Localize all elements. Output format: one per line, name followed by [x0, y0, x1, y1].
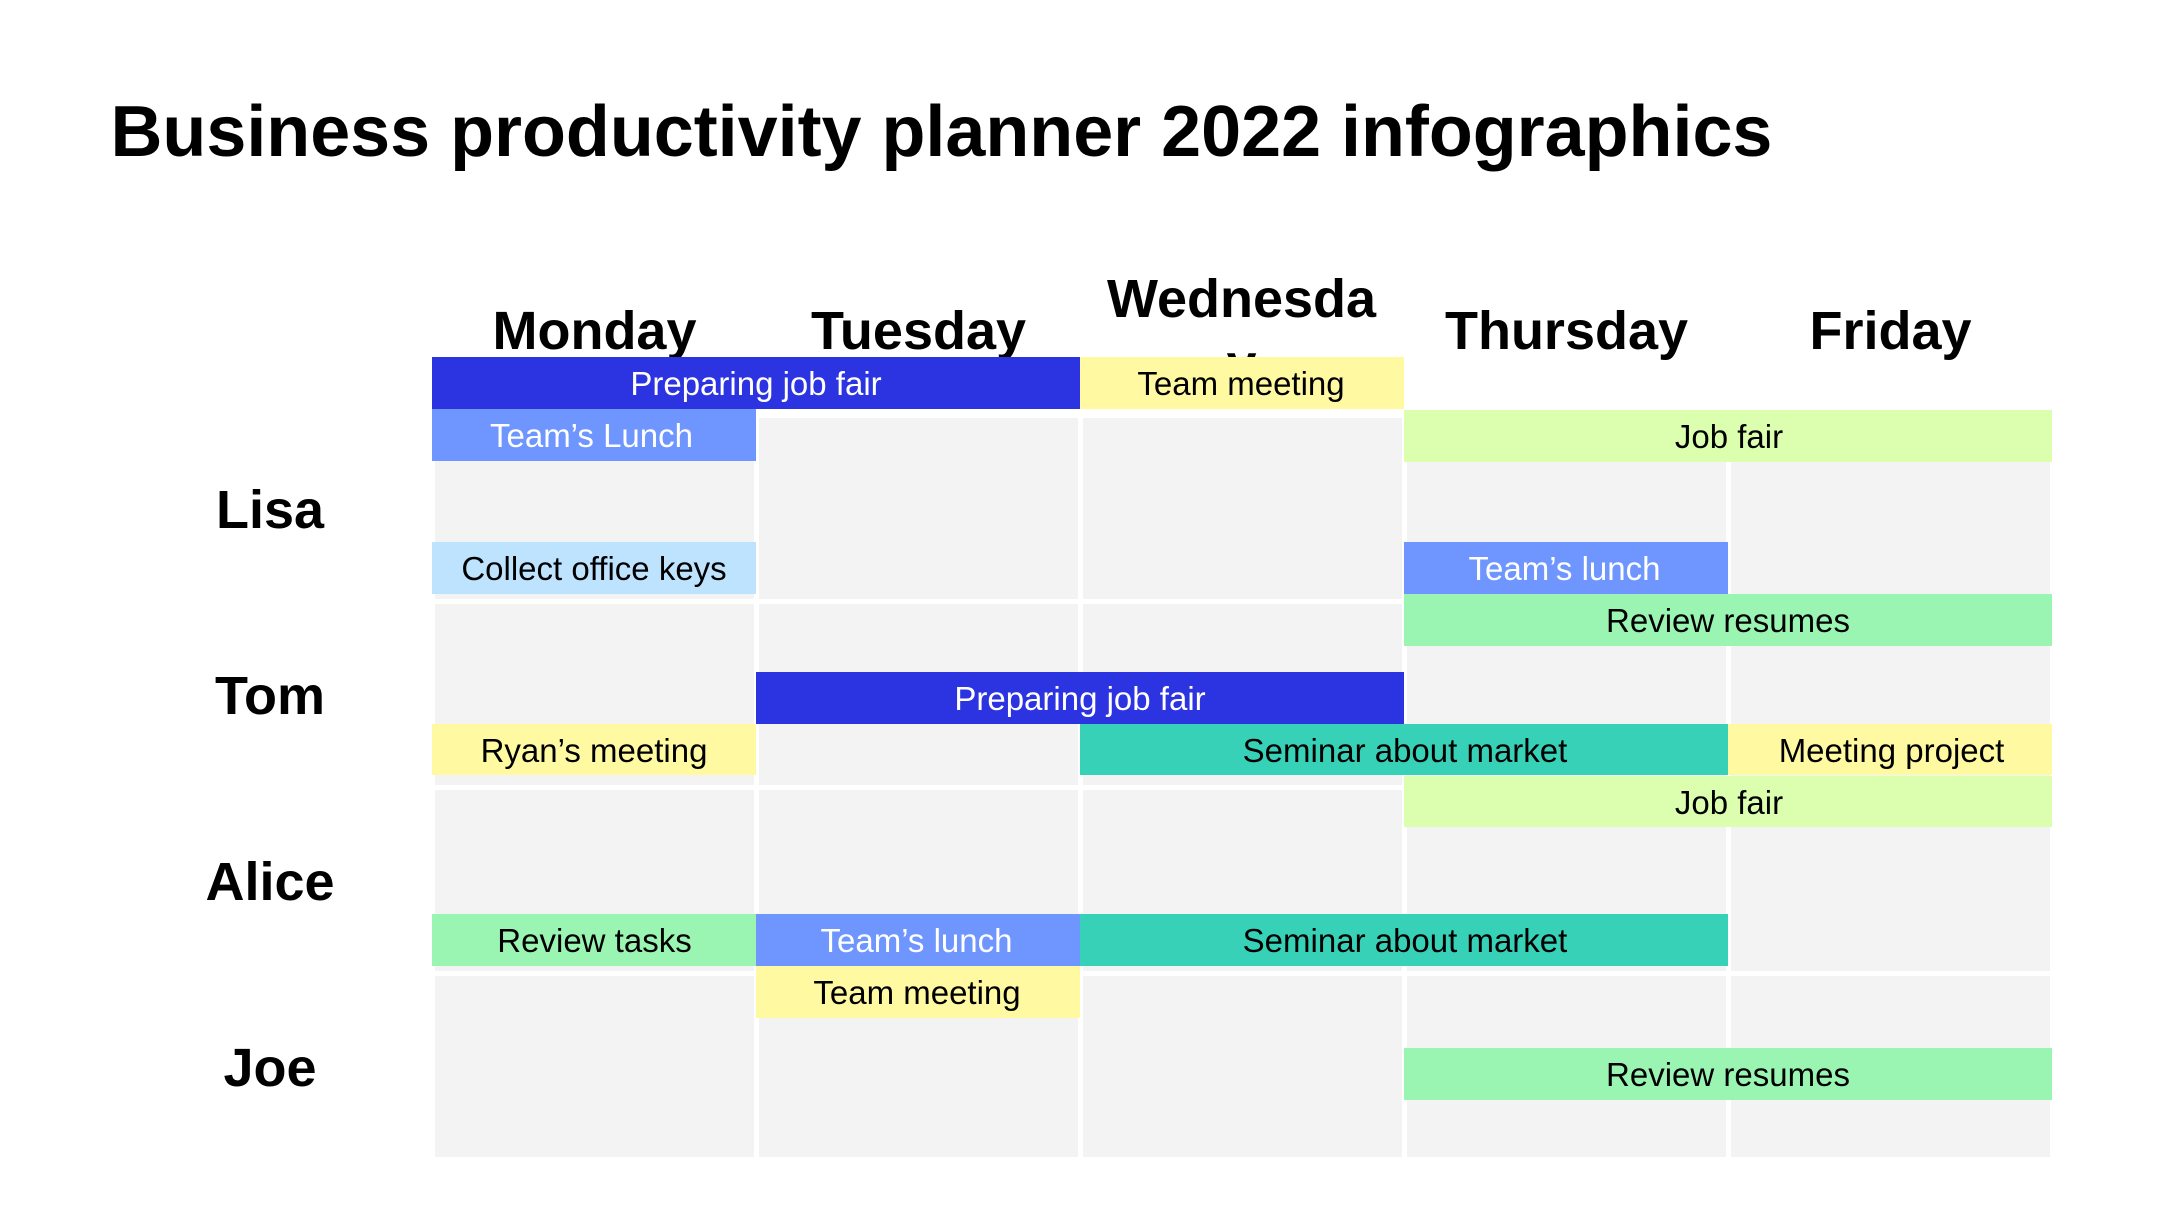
- event: Seminar about market (Alice): Seminar about market: [1243, 922, 1567, 959]
- event: Team meeting (Joe): Team meeting: [813, 974, 1021, 1011]
- event: Preparing job fair (Tom): Preparing job fair: [954, 680, 1206, 717]
- event: Team's lunch (Lisa): Team’s lunch: [1468, 550, 1660, 587]
- event: Meeting project (Tom): [1728, 724, 2052, 775]
- event: Team's lunch (Alice): [756, 914, 1080, 966]
- event: Review resumes (Joe): [1404, 1048, 2052, 1100]
- event: Collect office keys (Lisa): [432, 542, 756, 594]
- person label: Alice: Alice: [205, 852, 335, 912]
- event: Team's Lunch (Lisa): [432, 409, 756, 461]
- day heading: Wednesday (wrapped and clipped by the event bar): Wednesday: [1107, 269, 1376, 394]
- event: Team meeting (Lisa): [1080, 357, 1404, 409]
- event: Job fair (Lisa): Job fair: [1675, 418, 1783, 455]
- event: Meeting project (Tom): Meeting project: [1779, 732, 2004, 769]
- event: Seminar about market (Alice): [1080, 914, 1728, 966]
- event: Review resumes (Joe): Review resumes: [1606, 1056, 1850, 1093]
- title: Business productivity planner 2022 infographics: [110, 92, 1772, 172]
- event: Review resumes (Tom): Review resumes: [1606, 602, 1850, 639]
- event: Preparing job fair (Tom): [756, 672, 1404, 724]
- event: Job fair (Alice): Job fair: [1675, 784, 1783, 821]
- day heading: Friday: Friday: [1809, 301, 1972, 361]
- day heading: Tuesday: Tuesday: [811, 301, 1026, 361]
- event: Review tasks (Alice): Review tasks: [497, 922, 692, 959]
- event: Team's lunch (Alice): Team’s lunch: [820, 922, 1012, 959]
- event: Job fair (Lisa): [1404, 410, 2052, 462]
- event: Team's Lunch (Lisa): Team’s Lunch: [490, 417, 693, 454]
- event: Collect office keys (Lisa): Collect office keys: [461, 550, 727, 587]
- event: Review resumes (Tom): [1404, 594, 2052, 646]
- event: Preparing job fair (Lisa): [432, 357, 1080, 409]
- event: Team's lunch (Lisa): [1404, 542, 1728, 594]
- person label: Lisa: Lisa: [216, 480, 324, 540]
- day heading: Monday: Monday: [492, 301, 696, 361]
- event: Preparing job fair (Lisa): Preparing job fair: [630, 365, 882, 402]
- panel: planner grid: [435, 418, 2050, 1157]
- event: Seminar about market (Tom): [1080, 724, 1728, 775]
- event: Seminar about market (Tom): Seminar about market: [1243, 732, 1567, 769]
- event: Team meeting (Lisa): Team meeting: [1137, 365, 1345, 402]
- event: Review tasks (Alice): [432, 914, 756, 966]
- person label: Joe: Joe: [223, 1038, 317, 1098]
- event: Ryan's meeting (Tom): [432, 724, 756, 775]
- event: Ryan's meeting (Tom): Ryan’s meeting: [481, 732, 707, 769]
- event: Team meeting (Joe): [756, 966, 1080, 1018]
- day heading: Thursday: Thursday: [1445, 301, 1688, 361]
- person label: Tom: Tom: [215, 666, 325, 726]
- event: Job fair (Alice): [1404, 776, 2052, 827]
